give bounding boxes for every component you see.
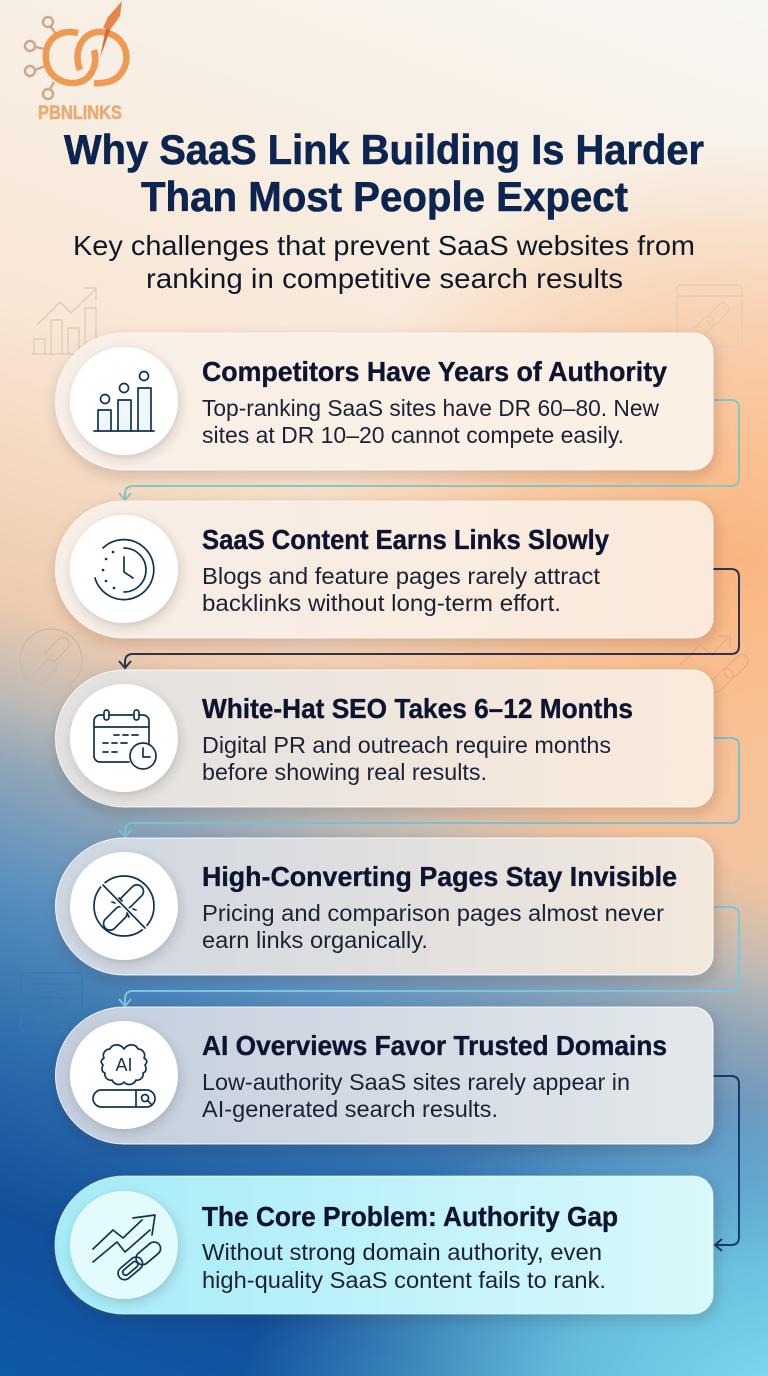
description: Without strong domain authority, even [202, 1239, 602, 1265]
description [202, 900, 664, 953]
icon: clock [95, 540, 154, 600]
description: backlinks without long-term effort. [202, 590, 561, 616]
description: Low-authority SaaS sites rarely appear in [202, 1069, 630, 1095]
panel: white-hat timeline [55, 670, 713, 807]
arrow: card 4 to card 5 [119, 907, 739, 1006]
description [202, 1069, 630, 1122]
description: Digital PR and outreach require months [202, 732, 611, 758]
arrow: card 1 to card 2 [119, 400, 739, 500]
description: before showing real results. [202, 759, 487, 785]
description: Top-ranking SaaS sites have DR 60–80. New [202, 395, 659, 421]
heading: Competitors Have Years of Authority [202, 356, 668, 387]
description [202, 563, 601, 616]
watermark: link circle [20, 629, 82, 691]
heading: The Core Problem: Authority Gap [202, 1201, 618, 1232]
title: Why SaaS Link Building Is Harder [64, 126, 704, 173]
title: Than Most People Expect [141, 173, 628, 220]
icon: broken link [94, 876, 154, 936]
icon label: AI: AI [115, 1055, 133, 1075]
description: sites at DR 10–20 cannot compete easily. [202, 422, 624, 448]
panel: core problem [55, 1176, 713, 1314]
arrow: card 2 to card 3 [119, 569, 739, 668]
icon: calendar [94, 710, 156, 769]
subtitle [73, 230, 695, 294]
description [202, 732, 611, 785]
panel: slow link earning [55, 501, 713, 638]
subtitle: ranking in competitive search results [146, 263, 623, 294]
panel: AI overviews [55, 1007, 713, 1144]
watermark: growth chart [32, 288, 98, 354]
icon: rising arrow and chain [93, 1215, 163, 1282]
panel: competitors authority [55, 333, 713, 470]
logo wordmark: PBNLINKS [38, 103, 122, 124]
description: high-quality SaaS content fails to rank. [202, 1267, 606, 1293]
description: Blogs and feature pages rarely attract [202, 563, 601, 589]
heading: AI Overviews Favor Trusted Domains [202, 1030, 667, 1061]
arrow: card 3 to card 4 [119, 738, 739, 837]
panel: invisible pages [55, 838, 713, 975]
logo [25, 1, 126, 124]
subtitle: Key challenges that prevent SaaS websites from [73, 230, 695, 261]
arrow: card 5 to card 6 [712, 1076, 739, 1251]
description: AI-generated search results. [202, 1096, 498, 1122]
heading: High-Converting Pages Stay Invisible [202, 861, 677, 892]
watermark: arrow and chain [680, 636, 751, 695]
heading: White-Hat SEO Takes 6–12 Months [202, 693, 633, 724]
description [202, 395, 659, 448]
watermark: browser with link [677, 285, 742, 347]
watermark: browser with globe [21, 973, 82, 1036]
icon: AI brain search [93, 1045, 155, 1107]
icon: logo link rings [25, 1, 126, 99]
title [64, 126, 704, 220]
description [202, 1239, 606, 1293]
icon: bar chart [94, 372, 154, 431]
description: Pricing and comparison pages almost never [202, 900, 664, 926]
heading: SaaS Content Earns Links Slowly [202, 524, 610, 555]
description: earn links organically. [202, 927, 428, 953]
